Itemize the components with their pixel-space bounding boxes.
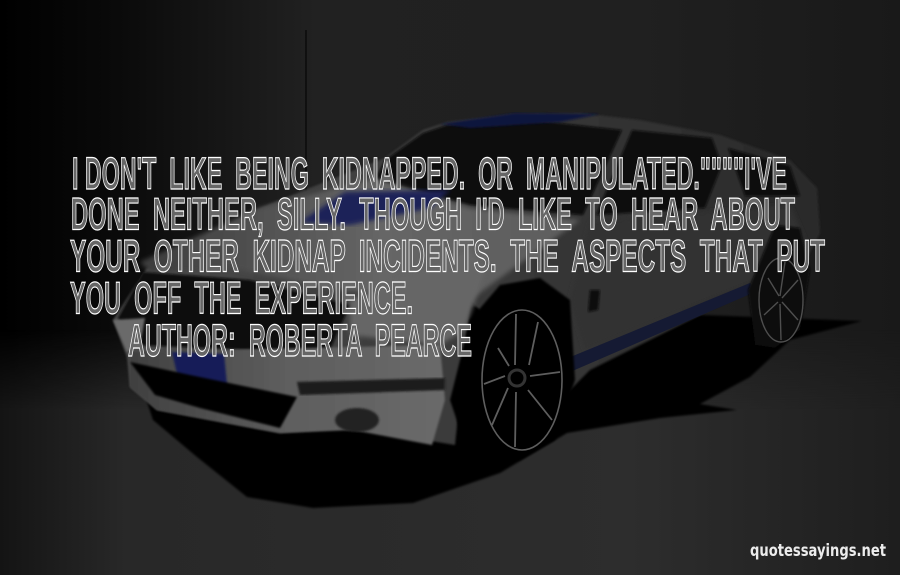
quote line 4: YOU OFF THE EXPERIENCE. xyxy=(70,272,413,324)
windshield xyxy=(375,118,622,215)
blue roof stripe xyxy=(440,113,600,128)
hood blue stripes xyxy=(300,190,450,225)
hood highlight xyxy=(140,178,580,300)
car xyxy=(113,113,820,460)
quote text xyxy=(70,148,825,366)
antenna xyxy=(305,30,307,205)
rear wheel arch xyxy=(748,225,810,348)
bumper blue stripes xyxy=(172,352,228,395)
door badge xyxy=(588,290,600,312)
car body xyxy=(113,113,820,445)
front wheel xyxy=(482,310,562,450)
front bumper xyxy=(130,345,445,445)
hood corner xyxy=(113,318,145,352)
author: AUTHOR: ROBERTA PEARCE xyxy=(128,315,472,366)
door panel xyxy=(570,205,805,350)
side windows xyxy=(596,130,722,215)
door sill stripe xyxy=(568,283,755,372)
headlight fender xyxy=(350,250,485,345)
front grille xyxy=(118,272,350,352)
bumper dark band xyxy=(297,378,445,395)
front wheel arch xyxy=(450,278,575,460)
lower intake xyxy=(130,362,297,428)
rear wheel xyxy=(759,258,803,342)
car shadow xyxy=(130,300,862,508)
fog light xyxy=(335,408,379,432)
